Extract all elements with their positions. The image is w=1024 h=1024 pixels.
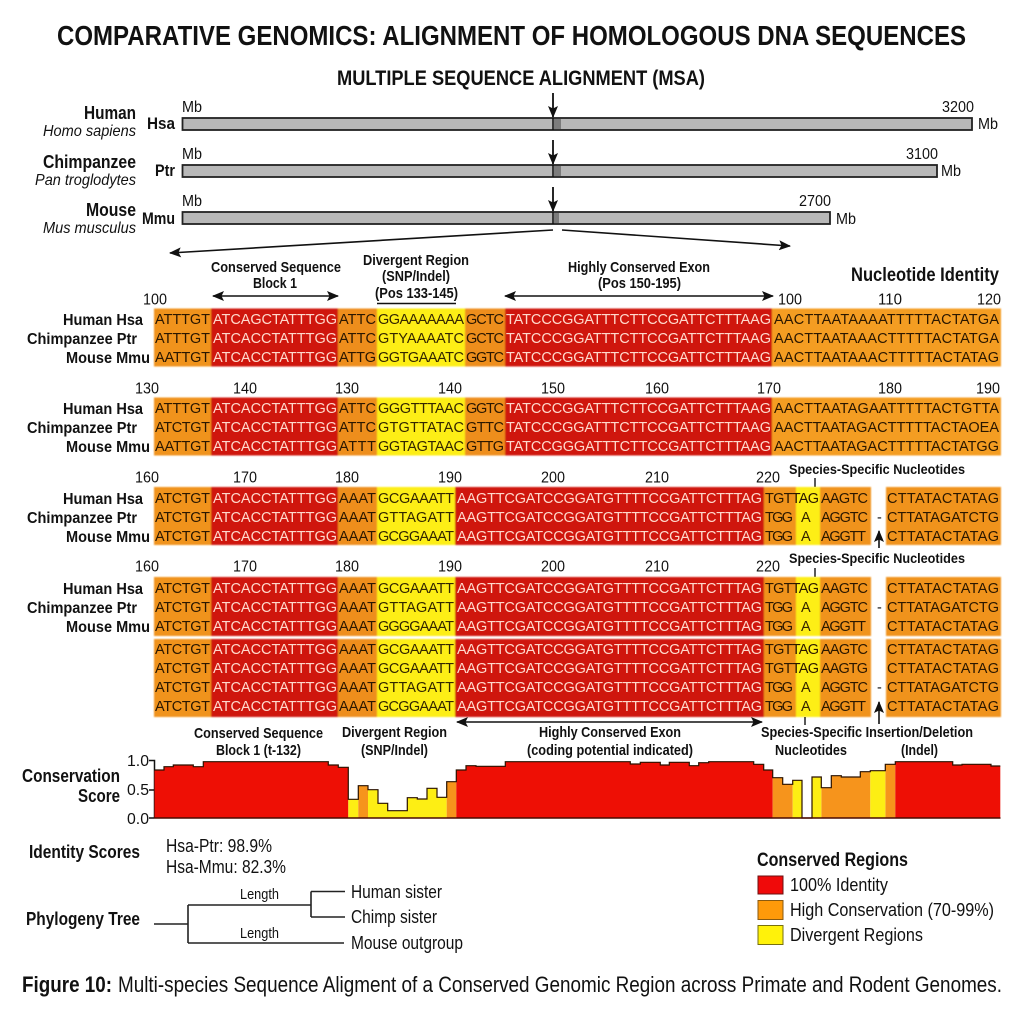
sequence rows: AAGTTCGATCCGGATGTTTTCCGATTCTTTAG — [457, 661, 762, 677]
sequence rows: ATTTGT — [155, 331, 210, 347]
position numbers: 180 — [878, 380, 902, 398]
panel: chromosome overview — [35, 93, 998, 253]
tree tips: Chimp sister — [351, 907, 437, 927]
sequence rows: ATCACCTATTTGG — [213, 642, 337, 658]
sequence rows: ATCTGT — [155, 581, 210, 597]
row labels: Mouse Mmu — [66, 619, 150, 636]
sequence rows: ATCACCTATTTGG — [213, 680, 337, 696]
annotation: highly conserved exon: (coding potential indicated) — [527, 742, 693, 759]
sequence rows: AAAT — [339, 600, 376, 616]
sequence rows: GTTAGATT — [378, 600, 454, 616]
sequence rows: ATCTGT — [155, 600, 210, 616]
sequence rows: AAGTTCGATCCGGATGTTTTCCGATTCTTTAG — [457, 581, 762, 597]
chart title — [22, 765, 120, 806]
species: mouse: Mus musculus — [43, 220, 136, 237]
sequence rows: TGG — [765, 600, 793, 616]
position numbers: 130 — [135, 380, 159, 398]
tree branches — [154, 892, 345, 943]
sequence rows: GTTC — [466, 420, 504, 436]
row labels — [27, 312, 150, 367]
sequence rows: GCTC — [466, 312, 504, 328]
sequence rows: GTGTTATAC — [378, 420, 464, 436]
sequence rows: AAAT — [339, 680, 376, 696]
legend: conserved regions: 100% Identity — [790, 874, 889, 895]
species: mouse: 2700 — [799, 193, 831, 210]
sequence rows: AAAT — [339, 491, 376, 507]
sequence rows: TATCCCGGATTTCTTCCGATTCTTTAAG — [506, 331, 771, 347]
conservation colour bands — [154, 308, 1001, 366]
legend: conserved regions: Divergent Regions — [790, 924, 923, 945]
position numbers — [143, 292, 1001, 308]
sequence rows: AAGTTCGATCCGGATGTTTTCCGATTCTTTAG — [457, 600, 762, 616]
sequence rows: CTTATACTATAG — [887, 699, 999, 715]
identity scores: Hsa-Ptr: 98.9% — [166, 836, 272, 856]
sequence rows: TGTTAG — [765, 661, 819, 677]
position numbers — [135, 558, 780, 576]
position numbers: 170 — [757, 380, 781, 398]
sequence rows: GGTAGTAAC — [378, 439, 464, 455]
sequence rows: A — [801, 510, 811, 526]
sequence rows: AAAT — [339, 699, 376, 715]
legend: conserved regions: High Conservation (70-99%) — [790, 899, 994, 920]
sequence rows: TGG — [765, 699, 793, 715]
sequence rows: ATTG — [339, 350, 376, 366]
sequence rows: AAGTTCGATCCGGATGTTTTCCGATTCTTTAG — [457, 510, 762, 526]
chart title: Score — [78, 785, 120, 806]
legend: conserved regions: Conserved Regions — [757, 850, 908, 871]
alignment block 2 — [27, 380, 1001, 456]
y axis — [127, 753, 154, 828]
annotation: conserved block 1: Conserved Sequence — [211, 259, 341, 276]
sequence rows: GGTC — [466, 350, 504, 366]
sequence rows: TGG — [765, 619, 793, 635]
sequence rows: AAAT — [339, 581, 376, 597]
sequence rows: ATTTGT — [155, 401, 210, 417]
sequence rows: CTTATACTATAG — [887, 619, 999, 635]
sequence rows: AACTTAATAAACTTTTTACTATGA — [774, 331, 999, 347]
chart title: Conservation — [22, 765, 120, 786]
position numbers: 160 — [645, 380, 669, 398]
sequence rows: TATCCCGGATTTCTTCCGATTCTTTAAG — [506, 420, 771, 436]
sequence rows: ATCTGT — [155, 529, 210, 545]
annotation: conserved block 1: Block 1 — [253, 275, 297, 292]
sequence rows: CTTATACTATAG — [887, 491, 999, 507]
row labels: Human Hsa — [63, 401, 143, 418]
sequence rows: ATCACCTATTTGG — [213, 661, 337, 677]
species: chimpanzee: Ptr — [155, 161, 175, 180]
row labels: Chimpanzee Ptr — [27, 510, 137, 527]
alignment block 3 — [27, 461, 1001, 548]
position numbers: 180 — [335, 558, 359, 576]
identity scores: Hsa-Mmu: 82.3% — [166, 857, 286, 877]
sequence rows: AAGTTCGATCCGGATGTTTTCCGATTCTTTAG — [457, 529, 762, 545]
sequence rows: AAGTTCGATCCGGATGTTTTCCGATTCTTTAG — [457, 491, 762, 507]
species: chimpanzee: Chimpanzee — [43, 152, 136, 172]
conservation score chart — [22, 753, 1000, 828]
species: human: Homo sapiens — [43, 123, 136, 140]
species: human: Human — [84, 103, 136, 123]
sequence rows: GCGAAATT — [378, 581, 454, 597]
sequence rows: ATCACCTATTTGG — [213, 420, 337, 436]
sequence rows: ATCACCTATTTGG — [213, 510, 337, 526]
sequence rows: AAAT — [339, 642, 376, 658]
position numbers — [135, 380, 1000, 398]
species: human: Mb — [978, 116, 998, 133]
annotation: divergent region: Divergent Region — [363, 252, 469, 269]
sequence rows: GTTAGATT — [378, 680, 454, 696]
species: chimpanzee: Mb — [941, 163, 961, 180]
sequence rows: AACTTAATAGACTTTTTACTAOEA — [774, 420, 999, 436]
sequence rows: ATCACCTATTTGG — [213, 331, 337, 347]
sequence rows: TGG — [765, 529, 793, 545]
callout: species-specific nucleotides: Species-Specific Nucleotides — [789, 550, 965, 566]
identity scores: Identity Scores — [29, 842, 140, 862]
sequence rows: ATCTGT — [155, 661, 210, 677]
sequence rows: ATTC — [339, 331, 376, 347]
tree tips: Human sister — [351, 882, 442, 902]
sequence rows: AGGTC — [821, 600, 868, 616]
sequence rows: GGTC — [466, 401, 504, 417]
position numbers: 190 — [976, 380, 1000, 398]
sequence rows: - — [877, 510, 882, 526]
sequence rows: TGG — [765, 680, 793, 696]
sequence rows: AAGTC — [821, 491, 868, 507]
sequence rows: CTTATACTATAG — [887, 661, 999, 677]
conservation colour bands — [154, 577, 1001, 636]
position numbers: 220 — [756, 558, 780, 576]
sequence rows — [155, 581, 999, 635]
row labels: Mouse Mmu — [66, 350, 150, 367]
sequence rows: AAGTC — [821, 642, 868, 658]
sequence rows: - — [877, 600, 882, 616]
sequence rows: AAAT — [339, 661, 376, 677]
sequence rows: GGTGAAATC — [378, 350, 464, 366]
sequence rows: GCGAAATT — [378, 642, 454, 658]
sequence rows: ATTT — [339, 439, 376, 455]
row labels: Human Hsa — [63, 312, 143, 329]
sequence rows: TGTTAG — [765, 642, 819, 658]
sequence rows: ATCTGT — [155, 491, 210, 507]
row labels: Chimpanzee Ptr — [27, 420, 137, 437]
conservation colour bands — [154, 487, 1001, 545]
sequence rows: ATCACCTATTTGG — [213, 529, 337, 545]
figure caption: Figure 10: — [22, 972, 112, 997]
sequence rows: AACTTAATAAAATTTTTACTATGA — [774, 312, 999, 328]
sequence rows: A — [801, 619, 811, 635]
sequence rows: TGTTAG — [765, 581, 819, 597]
conservation colour bands — [154, 398, 1001, 456]
sequence rows: A — [801, 529, 811, 545]
sequence rows: CTTATAGATCTG — [887, 680, 999, 696]
sequence rows: - — [877, 680, 882, 696]
sequence rows: AAGTTCGATCCGGATGTTTTCCGATTCTTTAG — [457, 680, 762, 696]
position numbers: 180 — [335, 470, 359, 486]
sequence rows: ATCTGT — [155, 510, 210, 526]
position numbers: 210 — [645, 470, 669, 486]
sequence rows: ATCACCTATTTGG — [213, 581, 337, 597]
branch labels: Length — [240, 886, 279, 903]
annotation: highly conserved exon: Highly Conserved Exon — [539, 724, 681, 741]
alignment block 5 — [154, 639, 1001, 724]
position numbers: 200 — [541, 470, 565, 486]
sequence rows — [155, 401, 999, 455]
species: human: Hsa — [147, 114, 175, 133]
annotation: conserved block 1 — [211, 259, 341, 296]
species: chimpanzee — [35, 140, 961, 189]
sequence rows: ATCACCTATTTGG — [213, 699, 337, 715]
position numbers: 220 — [756, 470, 780, 486]
position numbers: 170 — [233, 470, 257, 486]
sequence rows: AGGTT — [821, 529, 866, 545]
row labels: Mouse Mmu — [66, 529, 150, 546]
sequence rows: CTTATAGATCTG — [887, 510, 999, 526]
position numbers: 210 — [645, 558, 669, 576]
annotation: conserved block 1: Conserved Sequence — [194, 725, 323, 742]
position numbers: 100 — [143, 292, 167, 308]
sequence rows: ATCACCTATTTGG — [213, 491, 337, 507]
annotation: conserved block 1 — [194, 725, 323, 759]
sequence rows: TATCCCGGATTTCTTCCGATTCTTTAAG — [506, 401, 771, 417]
subtitle: MULTIPLE SEQUENCE ALIGNMENT (MSA) — [337, 67, 705, 90]
sequence rows: AAGTTCGATCCGGATGTTTTCCGATTCTTTAG — [457, 699, 762, 715]
sequence rows: CTTATACTATAG — [887, 642, 999, 658]
tree tips: Mouse outgroup — [351, 933, 463, 953]
species: mouse: Mmu — [142, 209, 175, 228]
position numbers: 150 — [541, 380, 565, 398]
annotation: highly conserved exon: Highly Conserved Exon — [568, 259, 710, 276]
position numbers: 110 — [878, 292, 902, 308]
sequence rows: AACTTAATAAACTTTTTACTATAG — [774, 350, 999, 366]
sequence rows: ATCACCTATTTGG — [213, 619, 337, 635]
branch labels — [240, 886, 279, 942]
sequence rows — [155, 491, 999, 545]
species: chimpanzee: 3100 — [906, 146, 938, 163]
species: human — [43, 93, 998, 140]
sequence rows: A — [801, 699, 811, 715]
sequence rows: AGGTC — [821, 680, 868, 696]
sequence rows: AAGTTCGATCCGGATGTTTTCCGATTCTTTAG — [457, 642, 762, 658]
sequence rows: AACTTAATAGAATTTTTACTGTTA — [774, 401, 999, 417]
sequence rows: AAGTG — [821, 661, 868, 677]
sequence rows: CTTATACTATAG — [887, 581, 999, 597]
position numbers: 140 — [438, 380, 462, 398]
sequence rows — [155, 642, 999, 715]
position numbers: 190 — [438, 558, 462, 576]
sequence rows: AAAT — [339, 619, 376, 635]
position numbers: 160 — [135, 558, 159, 576]
sequence rows: GTTAGATT — [378, 510, 454, 526]
identity scores — [29, 836, 286, 877]
alignment block 1 — [27, 292, 1001, 367]
phylogeny tree — [26, 882, 463, 953]
sequence rows: GTTG — [466, 439, 504, 455]
sequence rows: AAAT — [339, 529, 376, 545]
position numbers: 130 — [335, 380, 359, 398]
row labels: Mouse Mmu — [66, 439, 150, 456]
sequence rows: GCTC — [466, 331, 504, 347]
sequence rows: ATTTGT — [155, 312, 210, 328]
position numbers — [135, 470, 780, 486]
sequence rows: AACTTAATAGACTTTTTACTATGG — [774, 439, 999, 455]
sequence rows: ATCAGCTATTTGG — [213, 312, 337, 328]
sequence rows: AGGTT — [821, 699, 866, 715]
annotation: divergent region — [342, 724, 447, 759]
sequence rows: GGGTTTAAC — [378, 401, 464, 417]
y axis: 1.0 — [127, 753, 149, 770]
row labels — [27, 401, 150, 456]
sequence rows: AAGTTCGATCCGGATGTTTTCCGATTCTTTAG — [457, 619, 762, 635]
sequence rows: ATTC — [339, 401, 376, 417]
conservation colour bands — [154, 639, 1001, 717]
sequence rows: ATCTGT — [155, 680, 210, 696]
species: mouse: Mb — [182, 193, 202, 210]
sequence rows: ATTC — [339, 420, 376, 436]
tree tips — [351, 882, 463, 953]
sequence rows: ATCTGT — [155, 420, 210, 436]
sequence rows: CTTATACTATAG — [887, 529, 999, 545]
species: mouse: Mouse — [86, 200, 136, 220]
annotation: highly conserved exon — [457, 722, 762, 759]
sequence rows: GGAAAAAAA — [378, 312, 464, 328]
sequence rows: TGG — [765, 510, 793, 526]
annotation: divergent region: (SNP/Indel) — [361, 742, 428, 759]
species: mouse — [43, 187, 856, 237]
sequence rows: GCGGAAAT — [378, 529, 454, 545]
sequence rows: ATCTGT — [155, 642, 210, 658]
sequence rows: AATTGT — [155, 350, 210, 366]
sequence rows: GCGAAATT — [378, 661, 454, 677]
annotation: species-specific and indel: Species-Specific Insertion/Deletion — [761, 724, 973, 741]
row labels: Human Hsa — [63, 581, 143, 598]
arrow: zoom left — [170, 230, 553, 253]
sequence rows: ATCACCTATTTGG — [213, 350, 337, 366]
sequence rows: GGGGAAAT — [378, 619, 454, 635]
alignment block 4 — [27, 550, 1001, 636]
annotation: species-specific and indel — [761, 717, 973, 759]
sequence rows: ATCTGT — [155, 619, 210, 635]
annotation: species-specific and indel: (Indel) — [901, 742, 938, 759]
row labels: Chimpanzee Ptr — [27, 331, 137, 348]
sequence rows: AATTGT — [155, 439, 210, 455]
y axis: 0.5 — [127, 782, 149, 799]
callout: species-specific nucleotides: Species-Specific Nucleotides — [789, 461, 965, 477]
species: human: 3200 — [942, 99, 974, 116]
row labels — [27, 581, 150, 636]
sequence rows: A — [801, 600, 811, 616]
position numbers: 100 — [778, 292, 802, 308]
annotation: conserved block 1: Block 1 (t-132) — [216, 742, 301, 759]
position numbers: 120 — [977, 292, 1001, 308]
sequence rows: TATCCCGGATTTCTTCCGATTCTTTAAG — [506, 312, 771, 328]
annotation: divergent region — [363, 252, 469, 304]
row labels — [27, 491, 150, 546]
sequence rows — [155, 312, 999, 366]
sequence rows: AGGTT — [821, 619, 866, 635]
legend: conserved regions — [757, 850, 994, 945]
sequence rows: ATCACCTATTTGG — [213, 401, 337, 417]
sequence rows: GCGGAAAT — [378, 699, 454, 715]
sequence rows: GCGAAATT — [378, 491, 454, 507]
position numbers: 170 — [233, 558, 257, 576]
row labels: Human Hsa — [63, 491, 143, 508]
heading: nucleotide identity: Nucleotide Identity — [851, 265, 999, 286]
species: chimpanzee: Mb — [182, 146, 202, 163]
region annotations below alignment — [194, 717, 973, 759]
position numbers: 140 — [233, 380, 257, 398]
arrow: indel marker — [878, 531, 880, 548]
sequence rows: AAAT — [339, 510, 376, 526]
sequence rows: AAGTC — [821, 581, 868, 597]
species: human: Mb — [182, 99, 202, 116]
position numbers: 190 — [438, 470, 462, 486]
sequence rows: ATCTGT — [155, 699, 210, 715]
row labels: Chimpanzee Ptr — [27, 600, 137, 617]
sequence rows: CTTATAGATCTG — [887, 600, 999, 616]
position numbers: 200 — [541, 558, 565, 576]
sequence rows: ATCACCTATTTGG — [213, 439, 337, 455]
y axis: 0.0 — [127, 811, 149, 828]
sequence rows: TATCCCGGATTTCTTCCGATTCTTTAAG — [506, 350, 771, 366]
arrow: zoom right — [562, 230, 790, 246]
arrow: indel marker — [878, 702, 880, 724]
sequence rows: ATTC — [339, 312, 376, 328]
annotation: highly conserved exon: (Pos 150-195) — [598, 275, 681, 292]
sequence rows: AGGTC — [821, 510, 868, 526]
sequence rows: GTYAAAATC — [378, 331, 464, 347]
position numbers: 160 — [135, 470, 159, 486]
species: mouse: Mb — [836, 211, 856, 228]
region annotations above alignment — [211, 252, 999, 304]
sequence rows: A — [801, 680, 811, 696]
annotation: divergent region: (Pos 133-145) — [375, 285, 458, 302]
annotation: divergent region: Divergent Region — [342, 724, 447, 741]
sequence rows: TGTTAG — [765, 491, 819, 507]
annotation: species-specific and indel: Nucleotides — [775, 742, 847, 759]
sequence rows: ATCACCTATTTGG — [213, 600, 337, 616]
tree label: Phylogeny Tree — [26, 909, 140, 929]
branch labels: Length — [240, 925, 279, 942]
species: chimpanzee: Pan troglodytes — [35, 172, 136, 189]
annotation: divergent region: (SNP/Indel) — [382, 268, 450, 285]
annotation: highly conserved exon — [505, 259, 773, 296]
area profile — [154, 762, 1000, 818]
sequence rows: TATCCGGGATTTCTTCCGATTCTTTAAG — [506, 439, 771, 455]
